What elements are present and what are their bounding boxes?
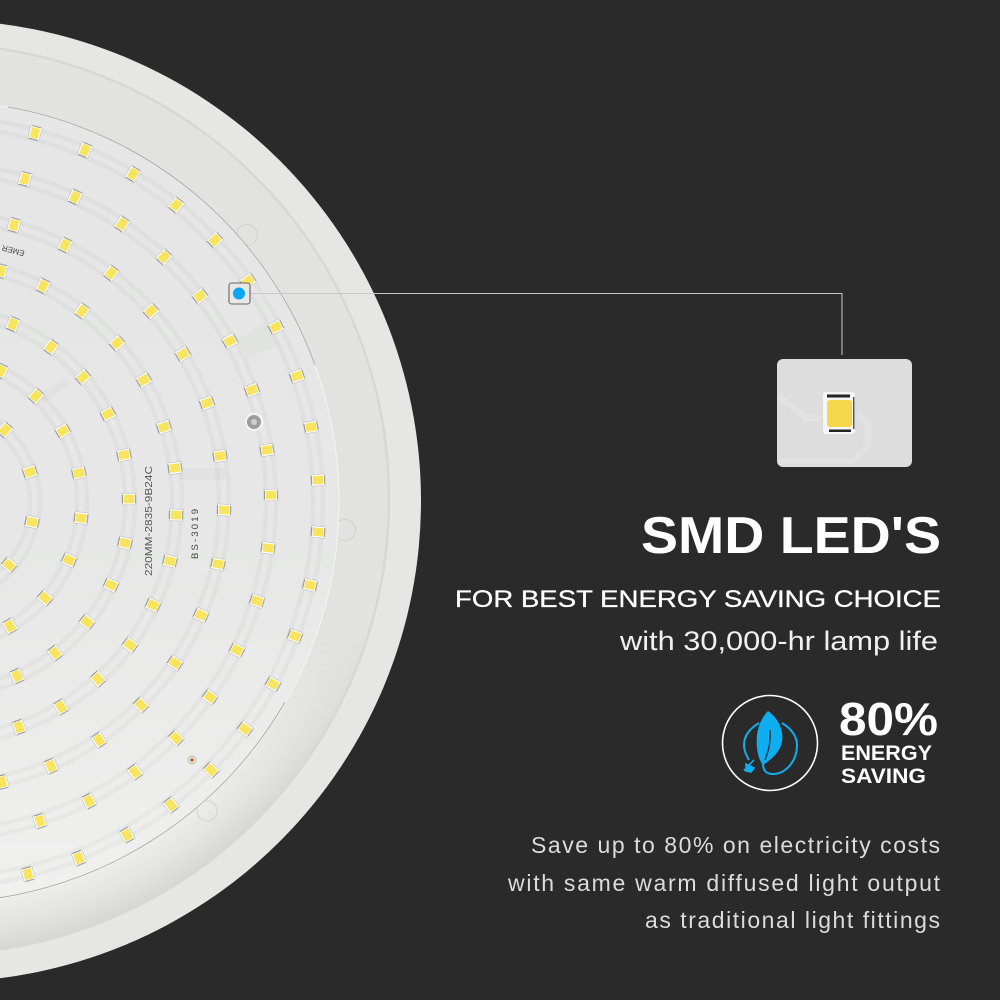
stat: 80% energy saving: ENERGY xyxy=(841,742,932,765)
plug xyxy=(744,760,754,772)
callout: LED close-up card xyxy=(777,359,912,467)
close-up LED chip xyxy=(823,392,855,434)
LED circuit board xyxy=(0,101,339,903)
board markings: 220MM-2835-9B24C xyxy=(143,466,155,576)
leaf vein xyxy=(765,730,770,760)
panel: round LED lamp xyxy=(0,20,421,982)
callout: blue marker xyxy=(229,283,250,304)
icon: energy saving leaf with plug xyxy=(722,696,818,790)
lamp inner diffuser band xyxy=(0,43,390,955)
leaf xyxy=(757,711,782,765)
stat: 80% energy saving xyxy=(839,693,938,788)
lamp life text: with 30,000-hr lamp life xyxy=(619,626,938,656)
description: as traditional light fittings xyxy=(645,907,940,933)
subheading: FOR BEST ENERGY SAVING CHOICE xyxy=(455,586,941,613)
copper traces xyxy=(0,117,323,887)
description xyxy=(507,832,941,933)
callout: leader line xyxy=(250,294,842,355)
solder point xyxy=(188,756,196,764)
mounting holes xyxy=(197,224,356,821)
stat: 80% energy saving: 80% xyxy=(839,693,938,745)
board markings: BS-3019 xyxy=(190,509,201,559)
description: Save up to 80% on electricity costs xyxy=(531,832,940,858)
board markings xyxy=(1,243,201,576)
power cord xyxy=(744,723,797,774)
stat: 80% energy saving: SAVING xyxy=(841,765,926,788)
description: with same warm diffused light output xyxy=(507,870,941,896)
board markings: EMER xyxy=(1,243,26,258)
close-up traces xyxy=(779,396,868,461)
LED chips xyxy=(0,125,325,882)
heading: SMD LED'S xyxy=(641,507,941,565)
screw xyxy=(245,413,263,431)
lamp outer rim xyxy=(0,20,421,982)
